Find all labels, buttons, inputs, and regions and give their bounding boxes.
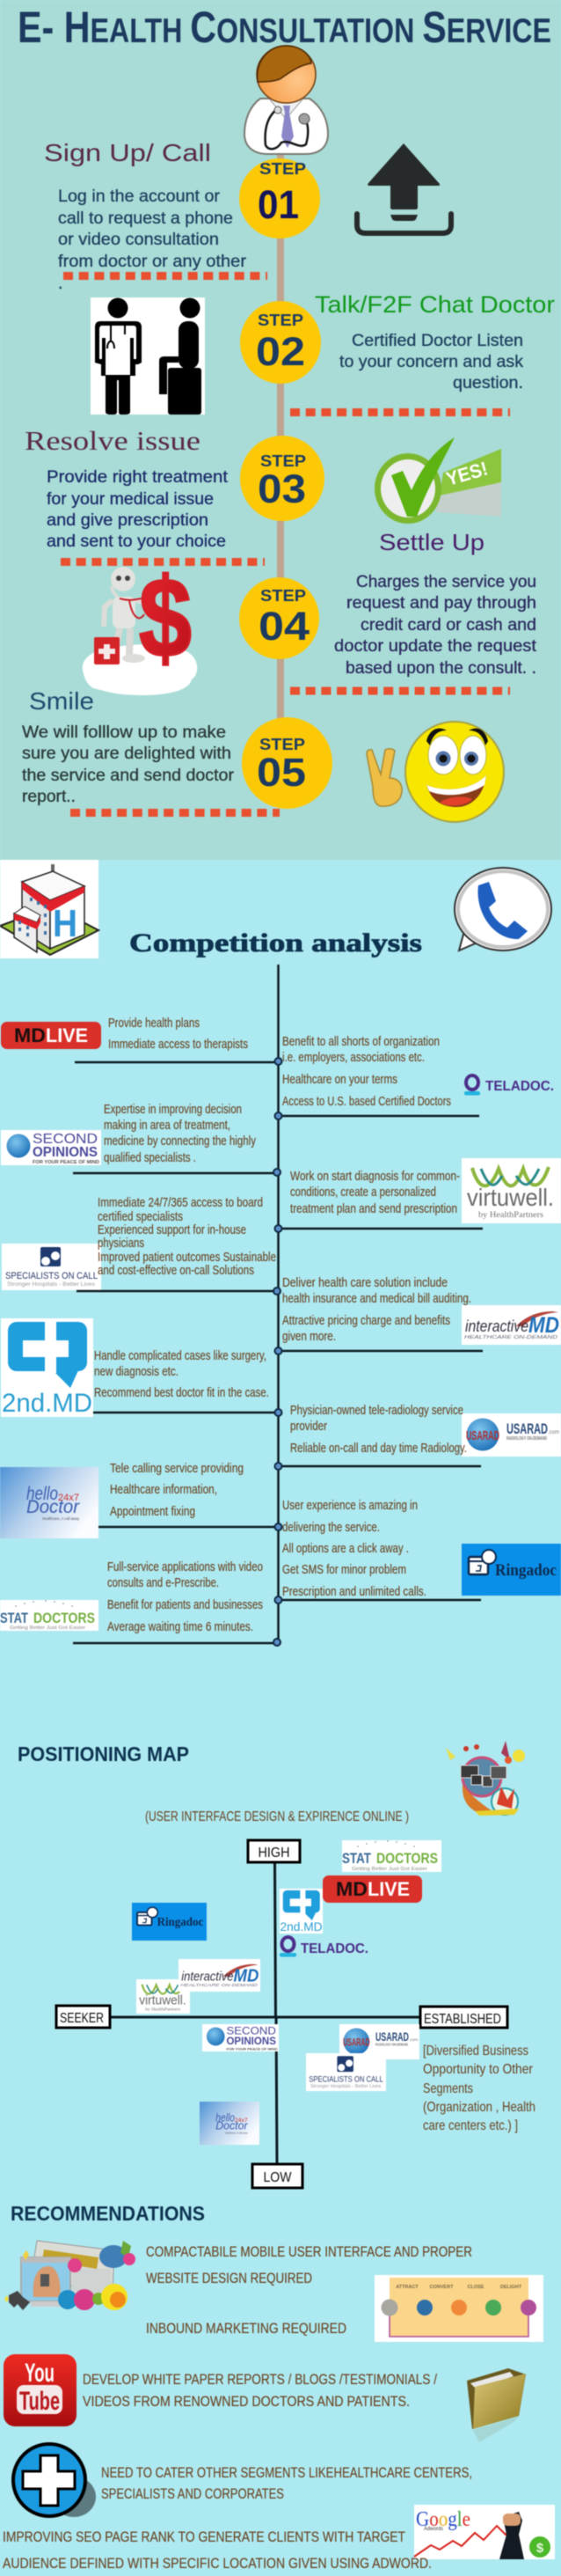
logo: Specialists On Call: Stronger Hospitals - Better Lives <box>7 1281 96 1288</box>
competitor note: Specialists On Call: physicians <box>98 1237 144 1251</box>
recommendation text: SEO: IMPROVING SEO PAGE RANK TO GENERATE CLIENTS WITH TARGET <box>3 2528 405 2545</box>
dashed divider 1 <box>63 272 267 280</box>
text block: step 2: to your concern and ask <box>339 352 523 371</box>
axis label: high <box>248 1840 300 1862</box>
recommendation text: content <box>83 2371 437 2410</box>
competitor note: MDLIVE <box>75 1016 281 1065</box>
logo: interactiveMD: interactive <box>465 1317 528 1335</box>
text block: step 4: credit card or cash and <box>361 615 536 635</box>
heading: settle up: Settle Up <box>379 529 484 555</box>
competitor note: MDLIVE: Provide health plans <box>108 1016 200 1031</box>
heading: smile: Smile <box>29 687 94 715</box>
text block: step 1: . <box>58 274 62 293</box>
map logo: Specialists On Call: Stronger Hospitals - Better Lives <box>310 2084 382 2089</box>
competitor note: Stat Doctors <box>73 1560 280 1646</box>
competitor note: Second Opinions: making in area of treatment, <box>104 1119 230 1133</box>
map logo: 2nd.MD <box>280 1889 323 1934</box>
step 1 badge <box>239 158 320 239</box>
timeline spine <box>277 150 284 722</box>
heading: resolve issue: Resolve issue <box>25 425 200 456</box>
competitor note: Specialists On Call: and cost-effective on-call Solutions <box>98 1264 254 1278</box>
competitor note: Virtuwell: conditions, create a personalized <box>290 1185 436 1200</box>
icon: web design collage <box>4 2241 135 2310</box>
text block: step 4: doctor update the request <box>334 636 537 656</box>
dashed divider 4 <box>290 686 510 695</box>
logo: Second Opinions: SECOND <box>33 1132 98 1147</box>
logo: Teladoc <box>464 1075 554 1095</box>
map logo: Second Opinions: SECOND <box>226 2025 276 2037</box>
dashed divider 2 <box>290 408 510 416</box>
logo: 2nd.MD: 2nd.MD <box>2 1389 92 1418</box>
logo: Ringadoc: Ringadoc <box>495 1561 557 1580</box>
logo: Hello Doctor: 24x7 <box>58 1493 79 1503</box>
competition timeline axis <box>277 965 280 1643</box>
competitor note: Specialists On Call: Improved patient outcomes Sustainable <box>98 1251 276 1265</box>
competitor note: 2nd.MD: new diagnosis etc. <box>94 1365 178 1379</box>
competitor note: Second Opinions: Expertise in improving decision <box>104 1103 242 1117</box>
recommendation text: website: COMPACTABILE MOBILE USER INTERFACE AND PROPER <box>146 2243 472 2260</box>
map logo: Stat Doctors: DOCTORS <box>376 1850 438 1867</box>
recommendation text: website: INBOUND MARKETING REQUIRED <box>146 2320 346 2337</box>
competitor note: Stat Doctors: Average waiting time 6 minutes. <box>107 1620 253 1634</box>
map logo: Virtuwell <box>136 1979 190 2014</box>
text block: step 5: We will folllow up to make <box>22 723 226 742</box>
logo: Ringadoc <box>462 1544 561 1596</box>
logo: Teladoc: TELADOC. <box>485 1079 554 1094</box>
map logo: 2nd.MD: 2nd.MD <box>280 1919 323 1934</box>
step 5 badge <box>242 717 332 809</box>
text block: step 3: Provide right treatment <box>47 467 229 487</box>
logo: Second Opinions: OPINIONS <box>33 1145 98 1160</box>
icon: hospital <box>0 860 98 958</box>
competitor note: interactiveMD <box>274 1276 483 1354</box>
step 1 badge: STEP <box>259 160 306 178</box>
map logo: Hello Doctor <box>200 2102 259 2145</box>
map logo: interactiveMD: MD <box>234 1965 259 1985</box>
positioning map axes <box>110 1863 419 2163</box>
competitor note: Virtuwell: treatment plan and send prescription <box>290 1202 457 1216</box>
map logo: interactiveMD: interactive <box>181 1971 234 1985</box>
heading: positioning map: POSITIONING MAP <box>18 1743 189 1765</box>
logo: Stat Doctors: DOCTORS <box>33 1610 95 1626</box>
map logo: USARAD: USARAD <box>343 2036 370 2049</box>
competitor note: Second Opinions: medicine by connecting the highly <box>104 1134 257 1149</box>
recommendation text: segments: SPECIALISTS AND CORPORATES <box>101 2485 284 2502</box>
competitor note: Teladoc: Healthcare on your terms <box>282 1073 397 1087</box>
logo: Hello Doctor: Healthcare, A call away <box>42 1516 80 1521</box>
competitor note: Specialists On Call <box>76 1196 280 1295</box>
competitor note: USARAD: Reliable on-call and day time Radiology. <box>290 1442 467 1456</box>
map logo: USARAD: USARAD <box>375 2030 409 2044</box>
map logo: Second Opinions <box>202 2024 279 2051</box>
logo: Hello Doctor: Doctor <box>26 1497 80 1517</box>
map logo: Hello Doctor: 24x7 <box>235 2117 248 2124</box>
axis label: seeker <box>56 2006 110 2028</box>
logo: USARAD: RADIOLOGY ON-DEMAND <box>506 1436 547 1442</box>
competitor note: Second Opinions <box>73 1103 280 1176</box>
recommendation text: segments <box>101 2464 472 2502</box>
text block: step 5: report.. <box>22 787 76 806</box>
axis label: high: HIGH <box>259 1846 290 1860</box>
text block: step 1: Log in the account or <box>58 187 220 206</box>
icon: yes check mark: YES! <box>443 458 491 490</box>
map logo: MDLIVE: MD <box>336 1878 368 1900</box>
image: Google AdWords growth: Adwords <box>424 2527 443 2532</box>
dashed divider 3 <box>61 558 265 566</box>
map logo: Specialists On Call: SPECIALISTS ON CALL <box>309 2074 383 2083</box>
logo: Second Opinions: FOR YOUR PEACE OF MIND <box>33 1160 99 1165</box>
map logo: Stat Doctors <box>342 1840 441 1872</box>
image: Google AdWords growth: $ <box>536 2541 544 2556</box>
competitor note: USARAD: provider <box>290 1420 327 1434</box>
map annotation: diversified business: Segments <box>423 2081 473 2096</box>
map logo: USARAD: RADIOLOGY ON-DEMAND <box>375 2042 408 2046</box>
recommendation text: SEO <box>3 2528 432 2572</box>
map logo: Second Opinions: FOR YOUR PEACE OF MIND <box>226 2047 278 2051</box>
heading: talk to doctor: Talk/F2F Chat Doctor <box>315 291 555 318</box>
icon: yes check mark <box>375 437 501 524</box>
competitor note: Specialists On Call: Immediate 24/7/365 access to board <box>98 1196 263 1210</box>
step 5 badge: STEP <box>259 736 305 753</box>
competitor note: interactiveMD: health insurance and medical bill auditing. <box>282 1292 471 1306</box>
step 5 badge: 05 <box>257 750 306 795</box>
map logo: Second Opinions: OPINIONS <box>226 2035 276 2047</box>
panel: analysis background <box>0 860 561 2576</box>
competitor note: Virtuwell <box>274 1170 483 1232</box>
step 3 badge: 03 <box>258 466 306 511</box>
competitor note: Hello Doctor: Healthcare information, <box>110 1483 217 1497</box>
icon: colourful devices art <box>446 1741 525 1816</box>
icon: robot doctor with dollar <box>83 555 197 695</box>
map logo: Ringadoc: Ringadoc <box>157 1915 203 1929</box>
map logo: Hello Doctor: hello <box>215 2110 235 2124</box>
competitor note: Ringadoc: Get SMS for minor problem <box>282 1563 406 1577</box>
heading: recommendations: RECOMMENDATIONS <box>11 2202 205 2225</box>
icon: robot doctor with dollar: $ <box>139 555 192 681</box>
dashed divider 5 <box>70 809 280 817</box>
logo: Hello Doctor: hello <box>26 1484 58 1504</box>
icon: doctor <box>244 46 328 154</box>
text block: step 2: Certified Doctor Listen <box>352 331 523 350</box>
recommendation text: website <box>146 2243 472 2337</box>
logo: MDLIVE <box>1 1022 101 1049</box>
text block: step 5 <box>22 723 235 806</box>
competitor note: Hello Doctor: Tele calling service providing <box>110 1462 244 1476</box>
competitor note: Ringadoc: Prescription and unlimited calls. <box>282 1585 426 1599</box>
logo: Virtuwell: virtuwell. <box>467 1184 554 1211</box>
competitor note: 2nd.MD: Handle complicated cases like surgery, <box>94 1349 266 1363</box>
map annotation: diversified business: (Organization , Health <box>423 2100 536 2115</box>
logo: 2nd.MD <box>1 1318 93 1418</box>
step 4 badge <box>239 577 319 659</box>
map logo: MDLIVE <box>323 1875 422 1903</box>
competitor note: Teladoc: i.e. employers, associations etc. <box>282 1051 425 1065</box>
logo: USARAD <box>462 1413 561 1457</box>
diagram: inbound marketing funnel: CONVERT <box>430 2285 454 2290</box>
map annotation: diversified business: [Diversified Business <box>423 2044 528 2059</box>
diagram: inbound marketing funnel <box>375 2275 543 2342</box>
competitor note: Teladoc: Benefit to all shorts of organization <box>282 1035 440 1049</box>
logo: YouTube: You <box>25 2359 55 2388</box>
competitor note: Virtuwell: Work on start diagnosis for common- <box>290 1170 460 1184</box>
icon: hospital: H <box>53 902 77 945</box>
competitor note: interactiveMD: Attractive pricing charge and benefits <box>282 1314 450 1328</box>
heading: competition analysis: Competition analysis <box>129 928 422 958</box>
diagram: inbound marketing funnel: ATTRACT <box>396 2285 419 2290</box>
logo: Specialists On Call <box>2 1244 101 1290</box>
logo: Hello Doctor <box>0 1467 98 1538</box>
icon: plus circle <box>13 2444 96 2517</box>
panel: how the service works background <box>0 0 561 860</box>
logo: Specialists On Call: SPECIALISTS ON CALL <box>5 1271 98 1281</box>
map logo: Stat Doctors: STAT <box>342 1850 371 1867</box>
axis label: established <box>420 2007 507 2028</box>
map logo: interactiveMD <box>178 1959 260 1992</box>
logo: Second Opinions <box>1 1130 101 1165</box>
diagram: inbound marketing funnel: DELIGHT <box>500 2285 522 2290</box>
logo: Stat Doctors <box>0 1600 98 1631</box>
map logo: USARAD: .com <box>409 2038 418 2043</box>
recommendation text: content: DEVELOP WHITE PAPER REPORTS / BLOGS /TESTIMONIALS / <box>83 2371 437 2388</box>
text block: step 1: or video consultation <box>58 230 219 249</box>
competitor note: USARAD: Physician-owned tele-radiology service <box>290 1404 463 1418</box>
text block: step 1: from doctor or any other <box>58 252 247 271</box>
text block: step 3: for your medical issue <box>47 489 214 509</box>
map logo: USARAD <box>339 2024 419 2059</box>
map logo: Teladoc: TELADOC. <box>301 1941 368 1956</box>
image: Google AdWords growth: Google <box>416 2508 470 2531</box>
logo: interactiveMD: HEALTHCARE ON-DEMAND <box>464 1335 558 1340</box>
competitor note: Second Opinions: qualified specialists . <box>104 1151 196 1165</box>
axis label: low <box>252 2164 302 2188</box>
text block: step 4 <box>334 572 537 678</box>
text block: step 3: and sent to your choice <box>47 532 226 551</box>
step 3 badge: STEP <box>260 452 306 470</box>
competitor note: Stat Doctors: consults and e-Prescribe. <box>107 1576 219 1590</box>
recommendation text: SEO: AUDIENCE DEFINED WITH SPECIFIC LOCATION GIVEN USING ADWORD. <box>3 2555 432 2572</box>
text block: step 2: question. <box>453 373 523 393</box>
text block: step 4: request and pay through <box>346 593 536 613</box>
axis label: seeker: SEEKER <box>60 2011 104 2026</box>
competitor note: USARAD <box>274 1404 481 1470</box>
text block: step 4: based upon the consult. . <box>346 658 536 678</box>
icon: doctor and patient <box>91 297 205 415</box>
competitor note: Teladoc <box>274 1035 479 1119</box>
logo: interactiveMD <box>462 1305 561 1345</box>
text block: step 3: and give prescription <box>47 510 208 530</box>
logo: YouTube: Tube <box>19 2387 60 2416</box>
step 3 badge <box>240 436 324 521</box>
map logo: Teladoc <box>280 1937 368 1957</box>
competitor note: interactiveMD: Deliver health care solution include <box>282 1276 448 1290</box>
step 1 badge: 01 <box>258 182 299 227</box>
image: Google AdWords growth <box>414 2505 555 2559</box>
logo: USARAD: .com <box>548 1430 559 1435</box>
icon: folder <box>467 2368 526 2442</box>
recommendation text: content: VIDEOS FROM RENOWNED DOCTORS AND PATIENTS. <box>83 2393 410 2410</box>
map logo: Hello Doctor: Healthcare, A call away <box>225 2131 248 2134</box>
step 2 badge: 02 <box>256 329 305 374</box>
step 4 badge: STEP <box>260 587 306 605</box>
map logo: Hello Doctor: Doctor <box>215 2118 248 2132</box>
competitor note: Specialists On Call: certified specialists <box>98 1210 183 1224</box>
icon: phone speech bubble <box>455 868 551 950</box>
map logo: Virtuwell: virtuwell. <box>139 1993 186 2007</box>
map logo: Ringadoc <box>132 1903 207 1941</box>
text block: step 1: call to request a phone <box>58 209 233 228</box>
step 2 badge <box>240 301 321 384</box>
map annotation: diversified business: Opportunity to Other <box>423 2062 534 2077</box>
map logo: MDLIVE: LIVE <box>368 1878 410 1900</box>
step 4 badge: 04 <box>259 604 310 649</box>
competitor note: Ringadoc: delivering the service. <box>282 1521 380 1535</box>
competitor note: Stat Doctors: Benefit for patients and businesses <box>107 1598 263 1612</box>
competitor note: 2nd.MD <box>93 1349 281 1416</box>
logo: MDLIVE: MD <box>14 1024 46 1046</box>
icon: victory hand <box>367 749 402 806</box>
competitor note: MDLIVE: Immediate access to therapists <box>108 1038 248 1052</box>
logo: Stat Doctors: STAT <box>0 1610 28 1626</box>
text block: step 3 <box>47 467 229 551</box>
logo: Stat Doctors: Getting Better Just Got Easier <box>10 1626 85 1631</box>
axis caption: (USER INTERFACE DESIGN & EXPIRENCE ONLINE ) <box>145 1809 409 1824</box>
logo: USARAD: USARAD <box>466 1428 499 1443</box>
icon: upload arrow <box>357 143 451 233</box>
text block: step 2 <box>339 331 523 393</box>
diagram: inbound marketing funnel: CLOSE <box>468 2285 484 2290</box>
logo: Virtuwell <box>462 1158 561 1223</box>
competitor note: Hello Doctor <box>98 1462 281 1530</box>
step 2 badge: STEP <box>258 312 303 329</box>
logo: YouTube <box>4 2354 76 2426</box>
map logo: Specialists On Call <box>306 2053 386 2091</box>
competitor note: interactiveMD: given more. <box>282 1330 336 1344</box>
competitor note: Hello Doctor: Appointment fixing <box>110 1505 195 1519</box>
logo: Virtuwell: by HealthPartners <box>478 1210 544 1219</box>
competitor note: 2nd.MD: Recommend best doctor fit in the case. <box>94 1386 269 1400</box>
text block: step 1 <box>58 187 247 293</box>
competitor note: Specialists On Call: Experienced support for in-house <box>98 1223 246 1237</box>
logo: MDLIVE: LIVE <box>46 1024 88 1046</box>
axis label: established: ESTABLISHED <box>424 2012 501 2027</box>
competitor note: Ringadoc: All options are a click away . <box>282 1542 409 1556</box>
competitor note: Ringadoc: User experience is amazing in <box>282 1499 418 1513</box>
map annotation: diversified business <box>423 2044 536 2133</box>
map logo: interactiveMD: HEALTHCARE ON-DEMAND <box>180 1983 258 1987</box>
map annotation: diversified business: care centers etc.) ] <box>423 2118 518 2133</box>
text block: step 5: sure you are delighted with <box>22 744 231 763</box>
heading: sign up: Sign Up/ Call <box>44 139 211 166</box>
title: E- HEALTH CONSULTATION SERVICE <box>18 3 551 52</box>
competitor note: Teladoc: Access to U.S. based Certified Doctors <box>282 1095 451 1109</box>
competitor note: Stat Doctors: Full-service applications with video <box>107 1560 263 1574</box>
competitor note: Ringadoc <box>274 1499 481 1604</box>
map logo: Virtuwell: by HealthPartners <box>145 2007 180 2012</box>
map logo: Stat Doctors: Getting Better Just Got Easier <box>352 1867 427 1872</box>
icon: smiley face <box>405 722 504 822</box>
text block: step 4: Charges the service you <box>356 572 536 591</box>
recommendation text: website: WEBSITE DESIGN REQUIRED <box>146 2270 312 2286</box>
axis label: low: LOW <box>264 2170 292 2185</box>
text block: step 5: the service and send doctor <box>22 766 235 785</box>
